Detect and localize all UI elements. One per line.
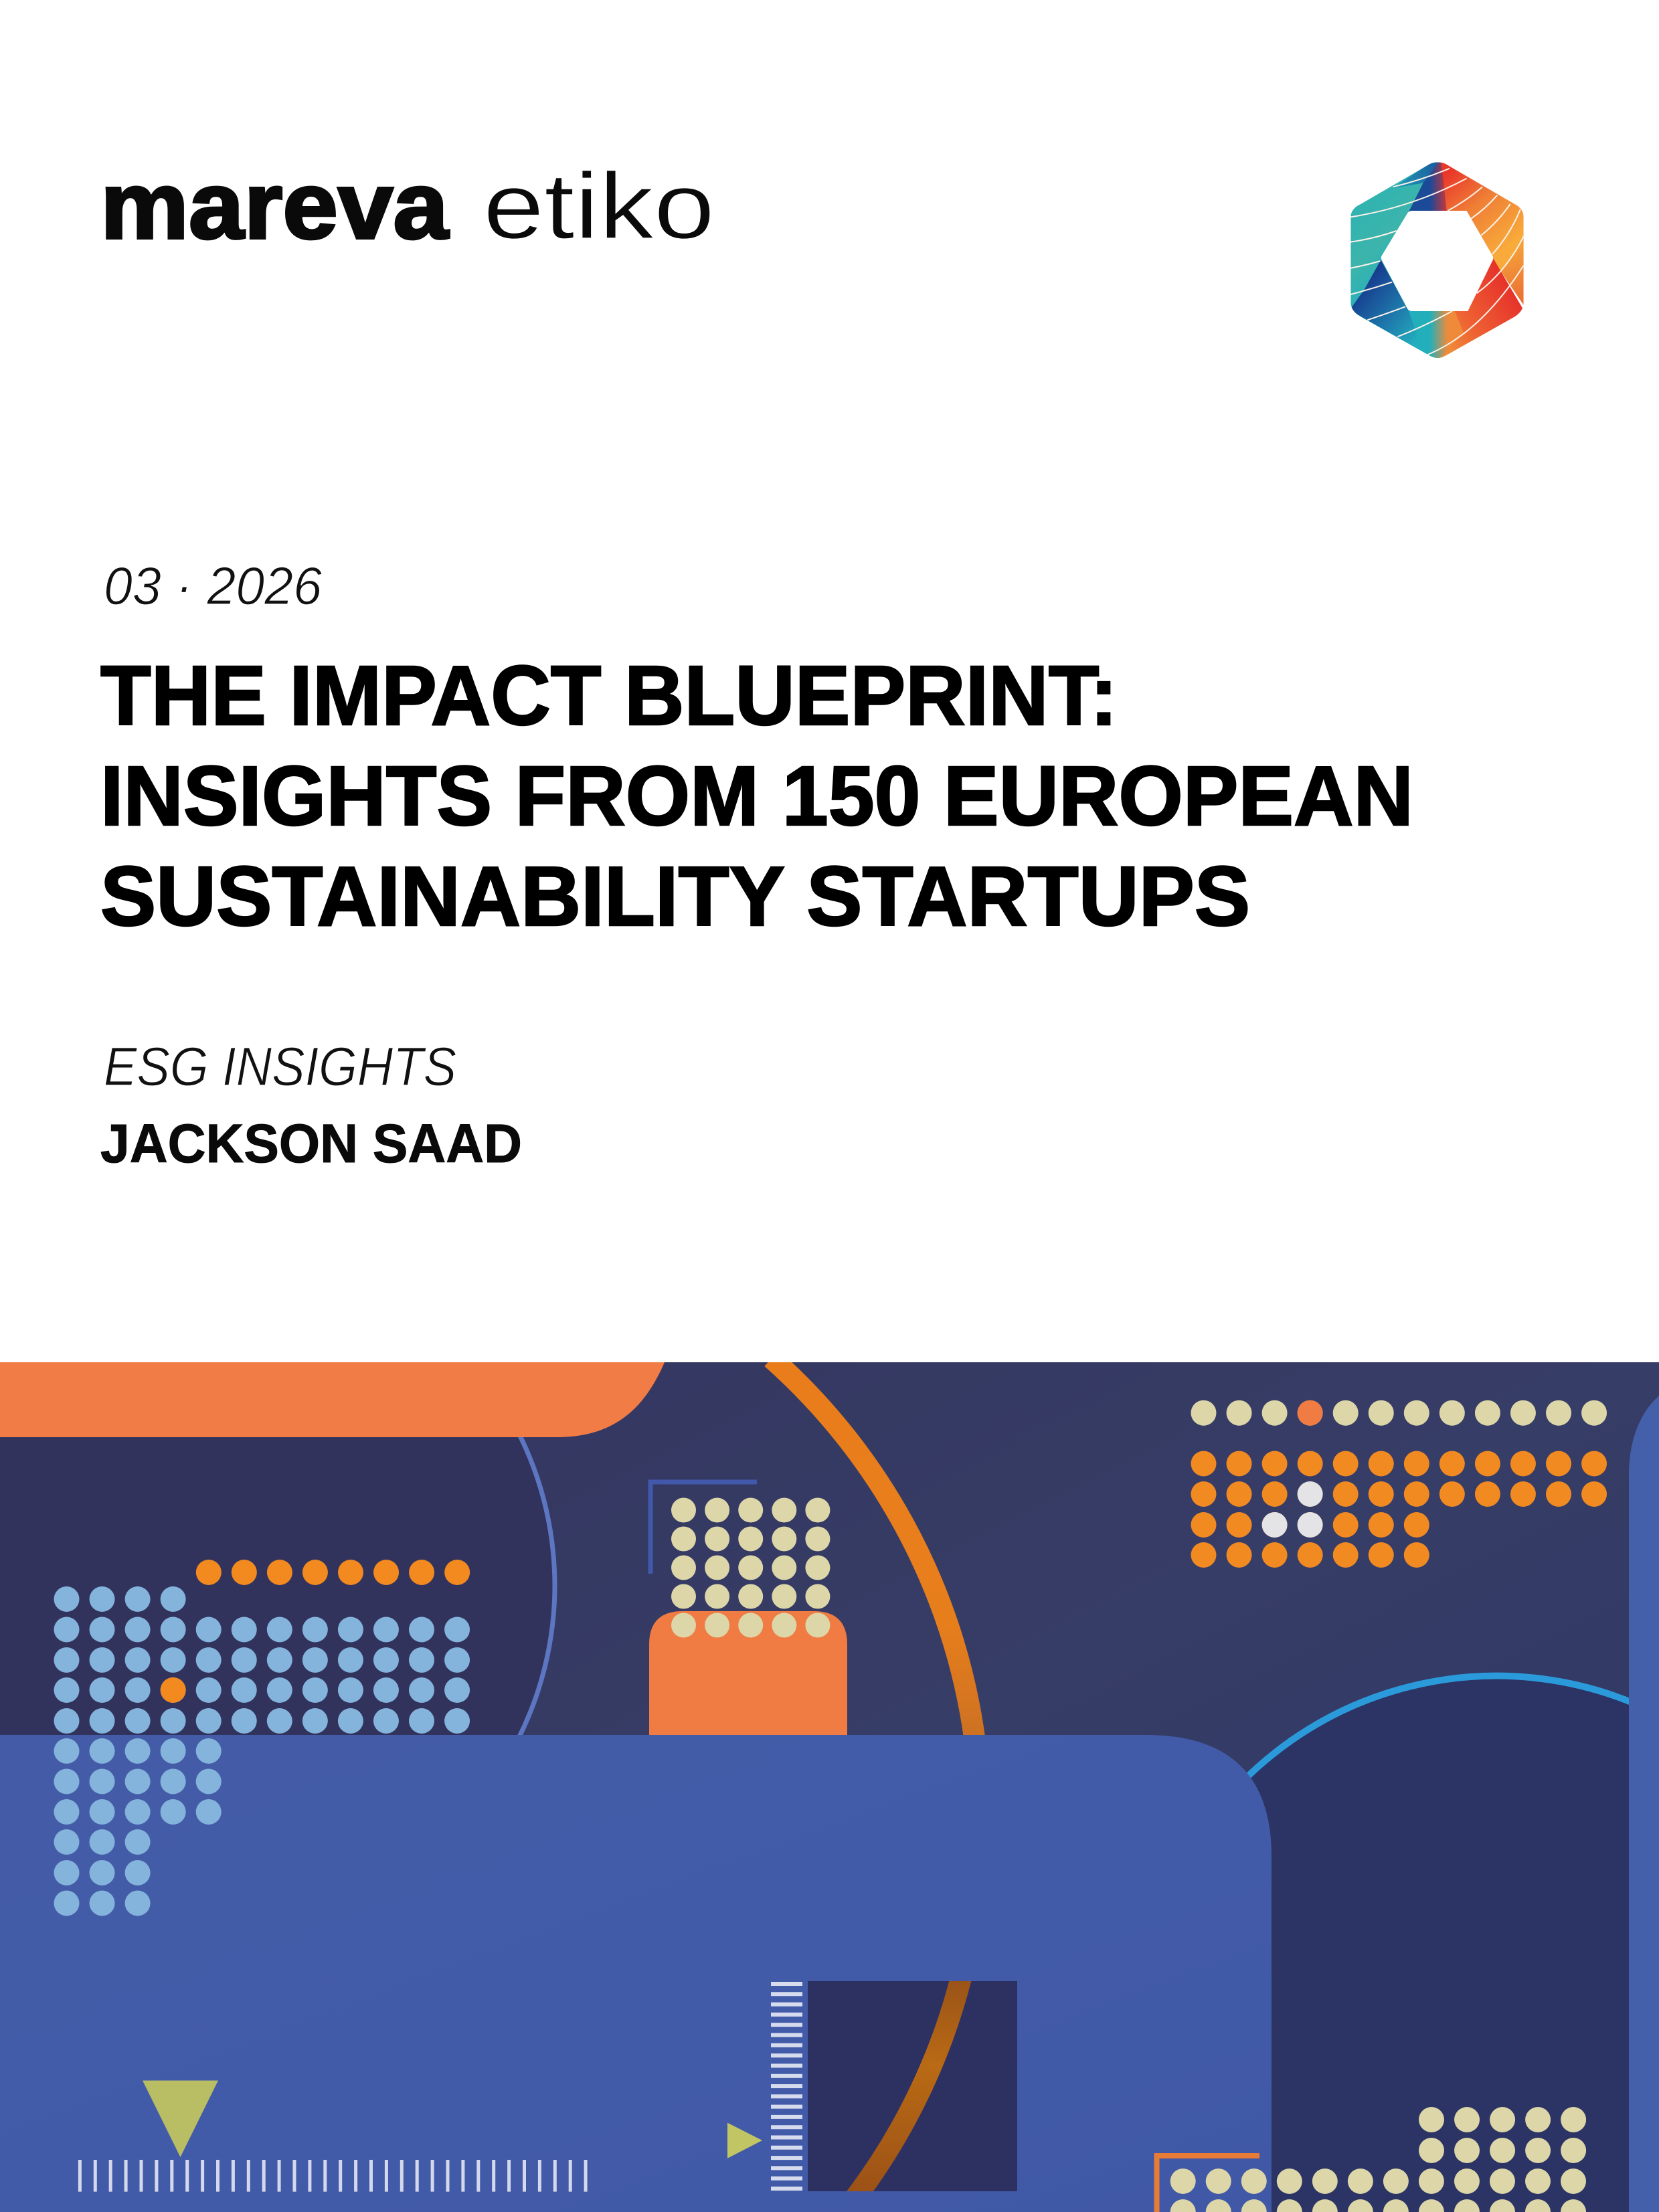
ladder stripes [771,1982,802,2191]
orange top bar [0,1362,665,1437]
brand wordmark: mareva [100,153,449,259]
panel: geometric illustration [0,1358,1659,2212]
brand wordmark: etiko [483,153,715,258]
title [100,648,1413,943]
orange rounded block [649,1611,847,1735]
cream dot grid bottom [1170,2120,1586,2212]
title: THE IMPACT BLUEPRINT: [100,648,1118,743]
icon: small triangle [727,2123,762,2158]
icon: hexagon logo [1347,159,1526,361]
orange accent dot [161,1677,186,1703]
icon: large triangle [143,2081,218,2157]
tick stripes [78,2160,588,2192]
issue date: 03 · 2026 [104,556,322,616]
large blue panel [0,1735,1272,2212]
category label: ESG INSIGHTS [104,1036,456,1097]
dark area under light blue arc [1251,1680,1486,1796]
arc: light blue [1247,1673,1629,1778]
cream dot grid [684,1510,818,1625]
blue right strip [1629,1396,1659,2212]
blue bracket [650,1482,757,1574]
panel background [523,1362,1659,1773]
orange and cream dot grid [1203,1413,1595,1555]
dark area inside thin blue arc [462,1701,531,1734]
title: INSIGHTS FROM 150 EUROPEAN [100,749,1413,843]
arc: large orange [772,1358,976,1753]
arc: thin blue [517,1437,557,1735]
title: SUSTAINABILITY STARTUPS [100,849,1250,943]
arc inside dark square [853,1967,964,2201]
brand wordmark [100,153,715,259]
author name: JACKSON SAAD [100,1113,522,1174]
orange bracket [1156,2156,1259,2212]
dark square [808,1981,1017,2191]
accent dots [1262,1400,1323,1538]
blue dot grid with orange row [67,1572,458,1903]
